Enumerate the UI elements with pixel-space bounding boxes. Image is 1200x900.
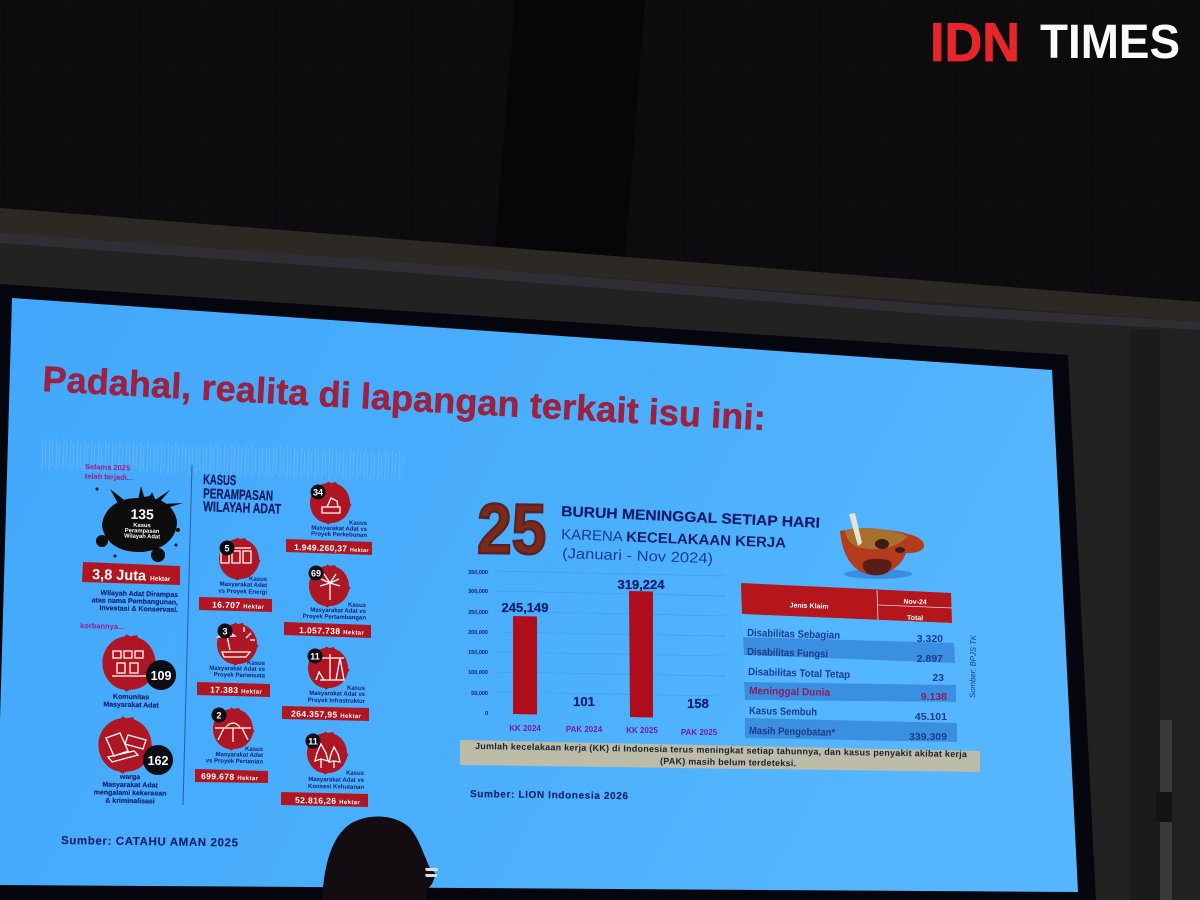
victim: communities xyxy=(102,634,176,710)
intro text: Selama 2025 xyxy=(85,462,130,473)
value labels: 101 xyxy=(573,694,595,709)
case: tourism: 17.383 Hektar xyxy=(210,685,263,696)
logo: IDN Times xyxy=(930,11,1180,73)
y axis labels: 350,000 xyxy=(468,570,488,576)
case: agriculture: Kasus xyxy=(245,747,264,753)
table header xyxy=(741,583,952,623)
row values: 2.897 xyxy=(917,653,943,665)
hectare badge xyxy=(82,562,180,585)
victim: residents: & kriminalisasi xyxy=(105,798,155,805)
row labels: Masih Pengobatan* xyxy=(749,725,836,739)
source left: Sumber: CATAHU AMAN 2025 xyxy=(61,835,239,849)
category labels: KK 2025 xyxy=(626,726,658,735)
victims label: korbannya... xyxy=(80,621,124,631)
case: mining: Kasus xyxy=(348,603,367,609)
panel: summary xyxy=(61,462,239,849)
victim: residents: Masyarakat Adat xyxy=(102,782,158,789)
case: infrastructure: Proyek Infrastruktur xyxy=(308,698,366,705)
row labels: Disabilitas Sebagian xyxy=(747,627,840,642)
description: Investasi & Konservasi. xyxy=(99,605,178,614)
row values: 9.138 xyxy=(921,691,947,703)
case: infrastructure: Masyarakat Adat vs xyxy=(309,691,366,698)
victim: residents: 162 xyxy=(148,754,168,768)
value labels: 158 xyxy=(687,696,709,711)
claims table: Jenis Klaim xyxy=(789,602,829,611)
logo: IDN Times: TIMES xyxy=(1040,16,1180,69)
y axis labels: 250,000 xyxy=(468,610,488,616)
source right: Sumber: LION Indonesia 2026 xyxy=(470,789,629,802)
y axis labels: 300,000 xyxy=(468,589,488,595)
case: plantation: Masyarakat Adat vs xyxy=(311,525,368,533)
value labels: 245,149 xyxy=(502,600,548,615)
table source: Sumber: BPJS TK xyxy=(968,634,978,698)
victim: communities: Komunitas xyxy=(113,694,149,701)
gridlines xyxy=(495,571,725,696)
ink blot with case count xyxy=(96,486,183,562)
case: agriculture: 2 xyxy=(216,710,222,720)
column divider xyxy=(183,465,192,805)
case: energy: Masyarakat Adat xyxy=(219,582,267,589)
projected slide xyxy=(0,298,1078,892)
row labels: Disabilitas Total Tetap xyxy=(748,666,850,681)
hectare badge: 3,8 Juta Hektar xyxy=(92,567,171,585)
ink blot with case count: Perampasan xyxy=(125,528,160,535)
heading: KASUS xyxy=(203,471,236,488)
big number 25: 25 xyxy=(477,490,547,570)
case: mining: 1.057.738 Hektar xyxy=(299,625,365,637)
case: energy: vs Proyek Energi xyxy=(218,589,267,596)
case: forestry: Konsesi Kehutanan xyxy=(308,784,364,791)
case: energy: 16.707 Hektar xyxy=(212,600,265,611)
claims table xyxy=(741,583,957,743)
heading xyxy=(203,471,282,517)
case: forestry: 11 xyxy=(308,736,318,746)
case: mining: Proyek Pertambangan xyxy=(303,614,366,622)
projector screen frame xyxy=(0,284,1096,900)
case: agriculture: Masyarakat Adat xyxy=(215,752,263,759)
case: tourism: Masyarakat Adat vs xyxy=(209,666,266,673)
victim: residents xyxy=(94,716,173,805)
presenter silhouette xyxy=(322,817,438,900)
case: infrastructure: 264.357,95 Hektar xyxy=(291,709,362,720)
case: infrastructure: 11 xyxy=(310,652,320,662)
category labels xyxy=(509,724,718,737)
category labels: KK 2024 xyxy=(509,724,541,733)
case: agriculture xyxy=(195,708,268,783)
case: energy xyxy=(199,538,272,612)
value labels xyxy=(502,577,709,711)
case: mining xyxy=(284,564,371,638)
logo: IDN Times: IDN xyxy=(930,11,1020,73)
y axis labels: 150,000 xyxy=(468,650,488,656)
headline xyxy=(561,504,820,567)
claims table: Total xyxy=(907,615,923,622)
case: energy: Kasus xyxy=(249,576,268,583)
headline: (Januari - Nov 2024) xyxy=(562,546,713,567)
row values xyxy=(909,633,947,743)
note box: (PAK) masih belum terdeteksi. xyxy=(660,756,796,768)
row values: 3.320 xyxy=(917,633,943,645)
claims table: Nov-24 xyxy=(903,599,927,606)
victim: communities: Masyarakat Adat xyxy=(103,701,159,710)
case: forestry xyxy=(281,732,368,807)
note box xyxy=(460,740,980,772)
case: forestry: Kasus xyxy=(346,771,365,777)
icon: damaged helmet xyxy=(840,513,924,579)
case: tourism: Proyek Pariwisata xyxy=(214,672,266,680)
headline: BURUH MENINGGAL SETIAP HARI xyxy=(561,504,820,532)
row values: 339.309 xyxy=(909,731,947,743)
row values: 23 xyxy=(932,672,944,684)
case: energy: 5 xyxy=(224,544,230,554)
table rows xyxy=(742,614,954,643)
screen surface xyxy=(0,298,1078,892)
case: agriculture: 699.678 Hektar xyxy=(201,771,259,782)
dotted decorative strip xyxy=(41,438,403,482)
category labels: PAK 2024 xyxy=(566,725,603,734)
description: Wilayah Adat Dirampas xyxy=(100,590,178,599)
row labels: Kasus Sembuh xyxy=(749,705,817,719)
case: tourism: 3 xyxy=(222,626,228,636)
case: tourism: Kasus xyxy=(247,661,266,667)
case: agriculture: vs Proyek Pertanian xyxy=(206,758,263,766)
case: plantation xyxy=(286,482,372,555)
case: infrastructure xyxy=(282,646,369,721)
category labels: PAK 2025 xyxy=(681,728,718,737)
note box: Jumlah kecelakaan kerja (KK) di Indonesia terus meningkat setiap tahunnya, dan kasus penyakit akibat kerja xyxy=(475,741,968,759)
case: infrastructure: Kasus xyxy=(347,686,366,692)
y axis labels: 200,000 xyxy=(468,630,488,636)
victim: communities: 109 xyxy=(151,669,171,683)
row labels: Disabilitas Fungsi xyxy=(747,646,828,660)
value labels: 319,224 xyxy=(618,577,665,592)
intro text: telah terjadi... xyxy=(85,471,133,482)
ink blot with case count: 135 xyxy=(130,506,154,522)
case: plantation: Kasus xyxy=(349,520,368,527)
headline: KARENA KECELAKAAN KERJA xyxy=(561,527,787,552)
case: mining: Masyarakat Adat vs xyxy=(310,608,367,615)
ink blot with case count: Wilayah Adat xyxy=(124,534,160,540)
y axis labels xyxy=(468,570,488,717)
row labels: Meninggal Dunia xyxy=(749,685,830,699)
y axis labels: 100,000 xyxy=(468,670,488,676)
heading: PERAMPASAN xyxy=(203,485,273,503)
y axis labels: 50,000 xyxy=(471,691,488,697)
case: plantation: 34 xyxy=(313,488,323,498)
case: forestry: Masyarakat Adat vs xyxy=(308,777,365,784)
description xyxy=(92,590,178,614)
title: Padahal, realita di lapangan terkait isu ini: xyxy=(42,358,767,438)
case: forestry: 52.816,26 Hektar xyxy=(295,795,361,806)
row labels xyxy=(747,627,850,739)
case: plantation: 1.949.260,37 Hektar xyxy=(294,542,370,554)
description: atas nama Pembangunan, xyxy=(92,597,178,607)
bars xyxy=(513,616,537,714)
case: mining: 69 xyxy=(311,568,321,578)
case: tourism xyxy=(197,622,270,697)
victim: residents: warga xyxy=(119,774,140,781)
victim: residents: mengalami kekerasan xyxy=(94,789,166,798)
heading: WILAYAH ADAT xyxy=(203,498,282,517)
row values: 45.101 xyxy=(915,711,947,723)
ink blot with case count: Kasus xyxy=(133,523,151,529)
case: plantation: Proyek Perkebunan xyxy=(311,531,367,539)
y axis labels: 0 xyxy=(485,711,488,717)
panel: land-grab cases xyxy=(195,471,372,807)
bar chart xyxy=(468,570,725,737)
